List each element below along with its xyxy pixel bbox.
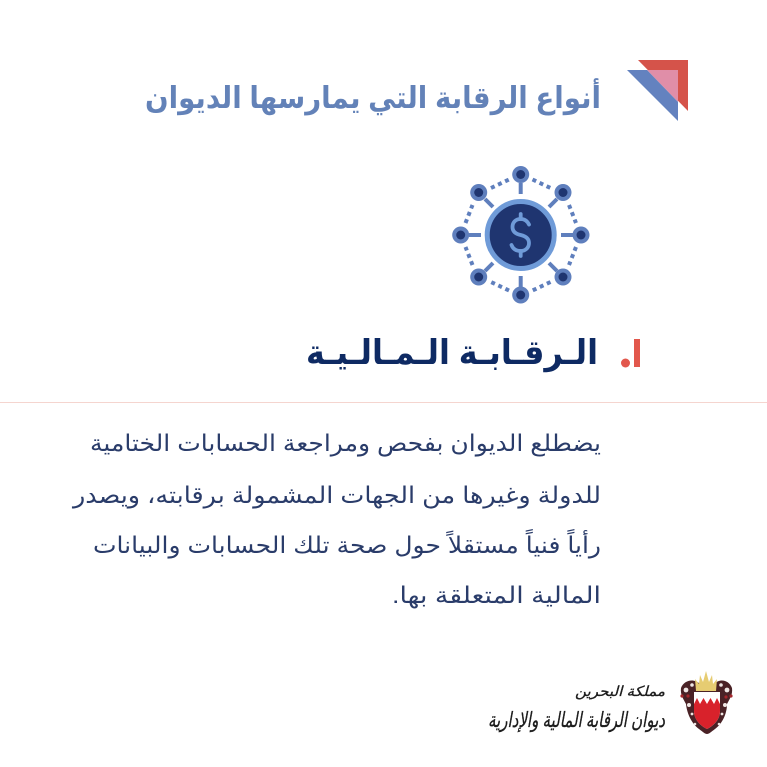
icon: dollar network <box>452 166 590 304</box>
logo wordmark <box>488 683 666 733</box>
logo wordmark: ديوان الرقابة المالية والإدارية <box>488 709 665 733</box>
section number <box>621 339 640 368</box>
title: أنواع الرقابة التي يمارسها الديوان <box>145 78 601 116</box>
body text: يضطلع الديوان بفحص ومراجعة الحسابات الختامية <box>90 430 601 457</box>
logo: coat of arms <box>680 671 733 734</box>
icon: corner triangles <box>627 60 688 121</box>
body text: للدولة وغيرها من الجهات المشمولة برقابته، ويصدر <box>72 482 601 509</box>
logo wordmark: مملكة البحرين <box>575 683 666 700</box>
body text: المالية المتعلقة بها. <box>392 582 601 609</box>
section heading: الـرقـابـة الـمـالـيـة <box>306 334 598 373</box>
body text <box>72 430 601 609</box>
body text: رأياً فنياً مستقلاً حول صحة تلك الحسابات والبيانات <box>93 529 601 559</box>
